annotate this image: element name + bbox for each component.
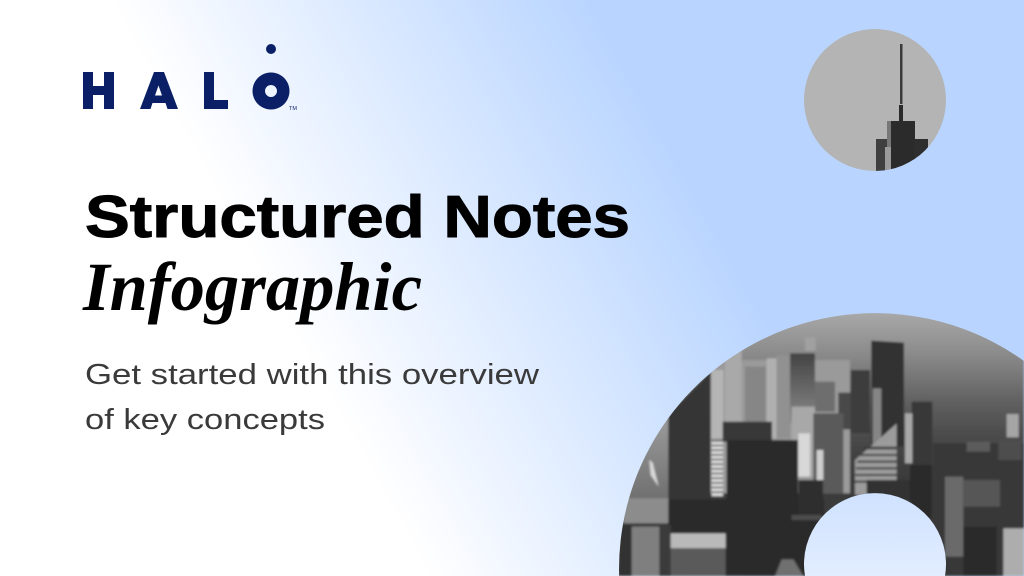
tall central tower xyxy=(871,341,904,447)
photo circle: skyscraper top xyxy=(804,29,946,171)
ring hole xyxy=(804,493,946,576)
title: Structured Notes xyxy=(85,184,630,250)
photo ring: city skyline xyxy=(610,300,1024,576)
left hazy backdrop xyxy=(629,416,670,499)
description text xyxy=(85,359,540,436)
right tower xyxy=(912,402,932,465)
central haze and distant towers xyxy=(710,360,850,493)
logo: HALO: TM xyxy=(289,106,297,112)
right hillside details xyxy=(934,444,1024,468)
striped pyramid building xyxy=(855,423,897,495)
logo: HALO xyxy=(83,44,297,112)
description text: Get started with this overview xyxy=(85,359,540,391)
description text: of key concepts xyxy=(85,404,325,436)
dark foreground left xyxy=(668,372,711,500)
left low buildings xyxy=(623,498,668,523)
subtitle: Infographic: Infographic xyxy=(82,249,422,325)
mid towers xyxy=(790,353,815,423)
